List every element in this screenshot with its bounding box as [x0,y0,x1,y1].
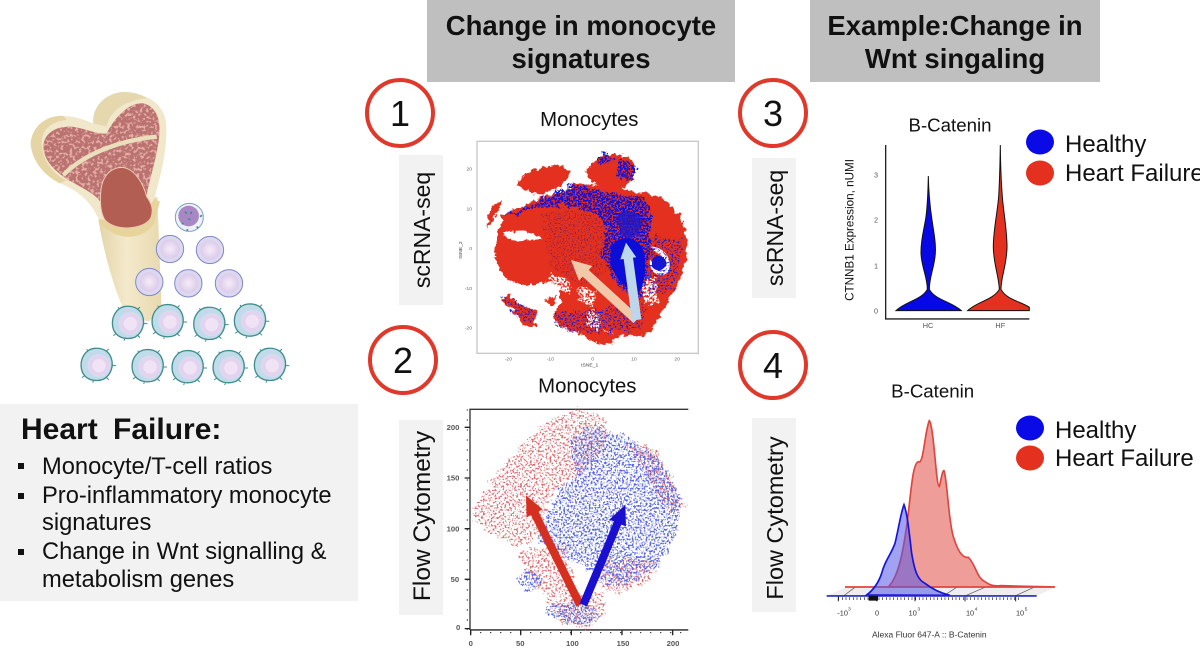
side label: flow cytometry left: Flow Cytometry [409,430,436,601]
arrow: blue [580,505,626,607]
panel: heart failure summary [0,404,358,601]
axis labels: 100 [447,524,459,533]
number badge 2 [370,327,436,393]
tick labels: 2 [874,216,878,225]
scatter: red points [472,409,687,628]
axis labels: -20 [465,326,472,332]
chart: flow histogram B-catenin [827,381,1055,640]
violin: heart failure [968,145,1029,311]
scatter: purple mixed cells [540,207,613,287]
icon: progenitor cells [136,235,243,297]
heading: heart failure: Heart Failure: [21,413,221,446]
side label: scRNA-seq right [752,158,796,298]
illustration: bone marrow and cells [31,92,289,385]
scatter: blue points [517,429,681,625]
axis labels: 0 [469,246,472,252]
side label: scRNA-seq left [399,155,443,305]
legend: violin plot [1026,130,1200,187]
tick labels: 10 [966,608,974,617]
tick labels: 10 [1016,608,1024,617]
axis labels [447,423,679,648]
axis labels: 0 [591,357,594,363]
axis labels [458,166,680,369]
axis labels: -10 [547,357,554,363]
header: example change in Wnt signaling: Wnt singaling [865,43,1045,74]
bullet list [18,454,332,593]
tick labels: HF [995,321,1006,330]
chart title: B-Catenin [891,381,974,402]
tick labels: 0 [874,306,878,315]
legend: flow histogram [1016,416,1194,472]
chart title: Monocytes [538,375,636,397]
chart: flow cytometry monocytes [447,375,688,648]
side label: scRNA-seq right: scRNA-seq [762,170,788,286]
tick labels: 10 [909,608,917,617]
axis ticks [838,597,1016,601]
axis labels: 50 [516,639,525,648]
cells pyramid [81,203,289,385]
axis labels: 50 [451,575,459,584]
tick labels: 3 [917,607,920,613]
chart: violin plot B-catenin [843,115,1029,330]
axis labels: -20 [505,357,512,363]
bullet list: metabolism genes [42,567,234,593]
violin: healthy [896,176,961,311]
side label: flow cytometry right [752,418,796,612]
histogram: heart failure [845,421,1055,587]
side label: flow cytometry left [399,420,443,615]
scatter: red clusters [487,154,687,343]
tick labels: 5 [1025,607,1028,613]
axis labels: tSNE_1 [581,363,599,369]
tick labels [837,607,1028,617]
number badge 4 [740,332,806,398]
axes [470,409,688,630]
scatter: white gaps [503,183,670,330]
legend: violin plot: Heart Failure [1065,160,1200,187]
y axis title: CTNNB1 Expression, nUMI [843,159,856,301]
icon: femur bone [31,92,166,322]
axis labels: 0 [469,639,473,648]
header: change in monocyte signatures: signatures [511,43,651,74]
header: example change in Wnt signaling: Example:Change in [827,10,1083,41]
number badge 2: 2 [393,340,413,381]
bullet list: Change in Wnt signalling & [42,539,327,565]
axis labels: 20 [466,166,472,172]
grid plane [827,587,1055,596]
axis labels: -10 [465,286,472,292]
header: change in monocyte signatures: Change in monocyte [446,10,716,41]
icon: monocytes [81,304,289,385]
axes [886,145,1029,319]
axis labels: 150 [447,474,459,483]
tick labels: 4 [975,607,978,613]
legend: flow histogram: Healthy [1055,417,1136,444]
chart: scRNA-seq tSNE monocytes [458,109,698,369]
x axis title: Alexa Fluor 647-A :: B-Catenin [872,630,987,640]
legend: flow histogram: Heart Failure [1055,445,1194,472]
scatter: blue cells [502,153,683,333]
side label: scRNA-seq left: scRNA-seq [409,172,435,288]
chart title: B-Catenin [909,115,991,136]
header: change in monocyte signatures [427,0,735,82]
bullet list: signatures [42,510,151,536]
arrow: red [526,495,584,607]
number badge 1 [367,80,433,146]
axis labels: 10 [631,357,637,363]
icon: granulocyte [175,203,203,231]
bullet list: Pro-inflammatory monocyte [42,483,332,509]
arrow: pale blue [620,243,641,321]
header: example change in Wnt signaling [810,0,1100,82]
axis labels: 150 [617,639,629,648]
bullet list: Monocyte/T-cell ratios [42,454,272,480]
number badge 4: 4 [763,345,783,386]
axis labels: 100 [566,639,579,648]
number badge 3: 3 [763,93,783,134]
tick labels: 0 [875,608,879,617]
axis labels: 0 [456,623,460,632]
number badge 3 [740,80,806,146]
tick labels [874,171,1006,330]
axis labels: 10 [466,206,472,212]
number badge 1: 1 [390,93,410,134]
tick labels: -10 [837,608,848,617]
axis labels: 200 [667,639,679,648]
tick labels: 3 [874,171,878,180]
arrow: pale orange [571,260,640,323]
axis labels: tSNE_2 [458,241,464,259]
side label: flow cytometry right: Flow Cytometry [762,436,788,600]
tick labels: 3 [848,607,851,613]
chart title: Monocytes [540,109,638,131]
legend: violin plot: Healthy [1065,131,1146,158]
axis labels: 20 [674,357,680,363]
axis labels: 200 [447,423,459,432]
histogram: healthy [867,505,950,595]
tick labels: HC [923,321,934,330]
tick labels: 1 [874,261,878,270]
